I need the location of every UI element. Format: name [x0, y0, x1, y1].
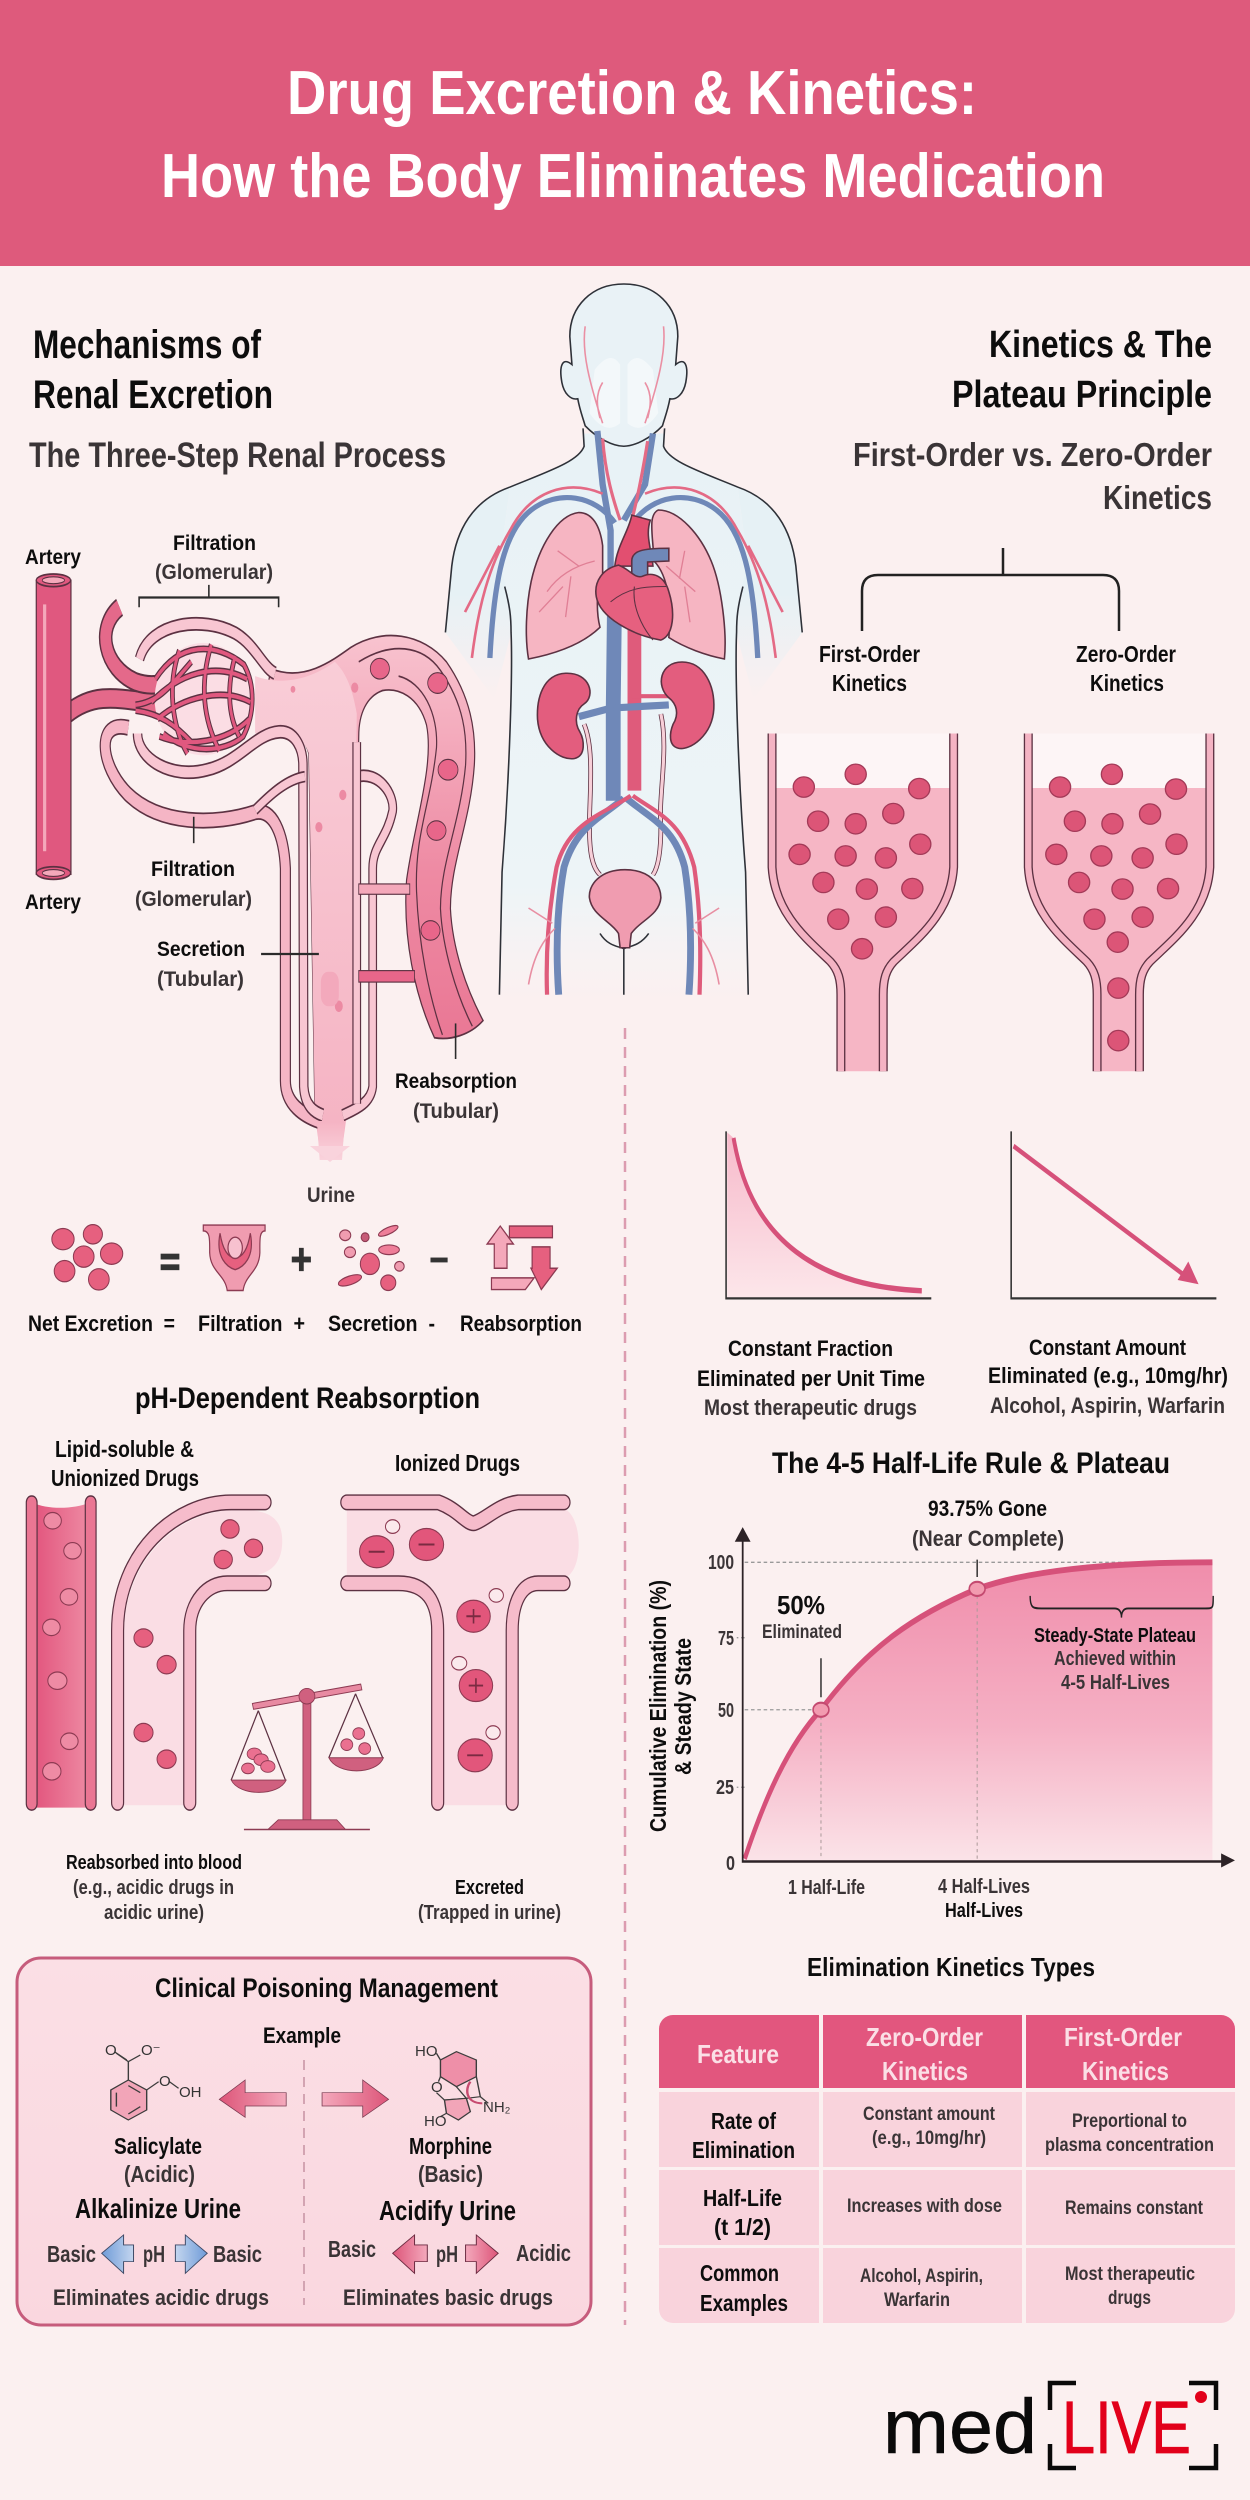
ph labels right: pH	[436, 2241, 458, 2267]
logo: medLIVE	[883, 2383, 1216, 2470]
chart: half-life plateau	[645, 1496, 1235, 1922]
label: artery top: Artery	[25, 546, 81, 569]
callout: steady-state plateau	[1034, 1625, 1196, 1694]
label: filtration top	[155, 532, 273, 584]
tree connector	[862, 548, 1119, 631]
row: common examples: Most therapeutic	[1065, 2264, 1195, 2285]
panel: left heading: The Three-Step Renal Process	[29, 436, 446, 475]
y axis ticks: 75	[718, 1628, 734, 1650]
row: rate of elimination: plasma concentration	[1045, 2135, 1214, 2156]
title	[161, 59, 1105, 211]
label: filtration lower	[135, 858, 252, 911]
tubule: ionized trapped	[347, 1502, 579, 1805]
illustration: nephron with labels	[25, 532, 517, 1207]
icon: reabsorption arrows	[487, 1226, 557, 1290]
reabsorption tubule	[259, 636, 483, 1110]
row: half-life	[703, 2185, 1204, 2240]
label: example: Example	[263, 2023, 341, 2048]
molecule labels: OH	[179, 2084, 202, 2101]
panel: right heading: Plateau Principle	[952, 374, 1212, 416]
molecule: morphine	[436, 2052, 488, 2120]
y axis title: Cumulative Elimination (%)	[645, 1580, 671, 1832]
chart: zero-order decline	[1011, 1131, 1216, 1298]
drug name: salicylate: Salicylate	[114, 2133, 202, 2159]
row: half-life: Remains constant	[1065, 2198, 1204, 2219]
caption: zero-order: Eliminated (e.g., 10mg/hr)	[988, 1363, 1228, 1388]
equation text: Secretion -	[328, 1311, 435, 1336]
molecule labels	[105, 2042, 511, 2130]
y axis ticks: 100	[708, 1552, 734, 1574]
icon: filtration cup	[203, 1225, 265, 1291]
label: filtration top: (Glomerular)	[155, 561, 273, 584]
label: lipid-soluble drugs: Lipid-soluble &	[55, 1436, 194, 1462]
glomerulus	[136, 643, 252, 755]
x axis labels: Half-Lives	[945, 1900, 1023, 1922]
note: eliminates basic drugs: Eliminates basic drugs	[343, 2285, 553, 2310]
callout: 93.75% gone: (Near Complete)	[912, 1526, 1064, 1551]
row: half-life: Increases with dose	[847, 2196, 1002, 2217]
row: common examples: drugs	[1108, 2288, 1151, 2309]
logo: medLIVE: med	[883, 2384, 1037, 2470]
label: filtration lower: Filtration	[151, 858, 235, 881]
heading: half-life rule: The 4-5 Half-Life Rule & Plateau	[772, 1447, 1170, 1480]
callout: 50% eliminated	[762, 1590, 842, 1643]
x axis labels: 4 Half-Lives	[938, 1876, 1030, 1898]
ph labels left	[47, 2241, 262, 2267]
molecule labels: HO	[415, 2043, 438, 2060]
label: first-order kinetics: Kinetics	[832, 670, 907, 696]
x axis labels	[788, 1876, 1030, 1922]
arrow: right to morphine	[322, 2080, 389, 2117]
equation text: Net Excretion =	[28, 1311, 175, 1336]
label: lipid-soluble drugs: Unionized Drugs	[51, 1465, 199, 1491]
callout: 50% eliminated: Eliminated	[762, 1622, 842, 1643]
row: common examples: Examples	[700, 2290, 788, 2316]
row: rate of elimination: Preportional to	[1072, 2111, 1187, 2132]
funnel: zero-order	[1028, 733, 1210, 1071]
y axis ticks: 25	[716, 1777, 734, 1799]
symbol: plus	[292, 1248, 311, 1271]
callout: 93.75% gone: 93.75% Gone	[928, 1496, 1047, 1521]
heading: pH-Dependent Reabsorption	[135, 1382, 480, 1415]
header banner	[0, 0, 1250, 266]
label: reabsorption: (Tubular)	[413, 1100, 499, 1123]
label: zero-order kinetics: Kinetics	[1090, 670, 1164, 696]
ph labels left: pH	[143, 2241, 165, 2267]
caption: reabsorbed into blood: acidic urine)	[104, 1902, 204, 1924]
table header row: Feature	[697, 2039, 779, 2069]
lungs	[526, 510, 725, 659]
drug name: salicylate	[114, 2133, 202, 2187]
ph labels right: Basic	[328, 2236, 376, 2262]
table header row: Kinetics	[882, 2056, 968, 2086]
callout: steady-state plateau: Steady-State Plateau	[1034, 1625, 1196, 1647]
label: reabsorption	[395, 1070, 517, 1123]
molecule labels: O⁻	[141, 2042, 161, 2059]
y axis title	[645, 1580, 696, 1832]
y axis ticks	[708, 1552, 735, 1875]
caption: reabsorbed into blood	[66, 1852, 242, 1924]
chart: first-order decay	[726, 1131, 931, 1298]
panel: left heading: Renal Excretion	[33, 373, 273, 417]
panel: right heading: First-Order vs. Zero-Order	[853, 436, 1212, 473]
arrow: left to salicylate	[219, 2080, 286, 2117]
central collecting tube	[255, 662, 357, 1144]
side tubules	[105, 607, 393, 1121]
urine outflow	[317, 1121, 345, 1160]
row: common examples: Common	[700, 2260, 779, 2286]
label: zero-order kinetics	[1076, 641, 1176, 696]
row: common examples: Alcohol, Aspirin,	[860, 2266, 983, 2287]
panel: right heading	[853, 324, 1212, 516]
balance scale	[231, 1684, 383, 1829]
callout: steady-state plateau: 4-5 Half-Lives	[1061, 1672, 1170, 1694]
logo: medLIVE: LIVE	[1062, 2386, 1191, 2469]
caption: excreted	[418, 1877, 561, 1924]
title: Drug Excretion & Kinetics:	[287, 59, 977, 128]
panel: right heading: Kinetics	[1103, 479, 1212, 516]
symbol: minus	[430, 1258, 448, 1262]
funnel: first-order	[772, 733, 954, 1071]
label: artery bottom: Artery	[25, 891, 81, 914]
callout: steady-state plateau: Achieved within	[1054, 1648, 1176, 1670]
note: eliminates acidic drugs: Eliminates acidic drugs	[53, 2285, 269, 2310]
row: rate of elimination	[692, 2104, 1214, 2163]
arrows: alkalinize urine	[102, 2235, 207, 2273]
ph labels right	[328, 2236, 571, 2267]
caption: first-order: Constant Fraction	[728, 1336, 893, 1361]
label: secretion: Secretion	[157, 938, 245, 961]
molecule labels: NH₂	[483, 2099, 511, 2116]
table: elimination kinetics	[659, 2015, 1235, 2323]
molecule labels: O	[105, 2042, 117, 2059]
row: rate of elimination: (e.g., 10mg/hr)	[872, 2128, 986, 2149]
drug name: morphine: Morphine	[409, 2133, 492, 2159]
label: secretion: (Tubular)	[157, 968, 244, 991]
table header row: Zero-Order	[866, 2022, 983, 2052]
artery vessel	[36, 574, 167, 879]
row: half-life: (t 1/2)	[714, 2214, 771, 2240]
row: common examples: Warfarin	[884, 2290, 950, 2311]
bladder	[589, 870, 661, 948]
caption: zero-order	[988, 1335, 1228, 1418]
caption: zero-order: Constant Amount	[1029, 1335, 1187, 1360]
label: filtration top: Filtration	[173, 532, 256, 555]
ph labels left: Basic	[213, 2241, 262, 2267]
label: lipid-soluble drugs	[51, 1436, 199, 1491]
table header row	[697, 2022, 1182, 2086]
label: zero-order kinetics: Zero-Order	[1076, 641, 1176, 667]
ph labels left: Basic	[47, 2241, 96, 2267]
heading: Clinical Poisoning Management	[155, 1973, 498, 2003]
panel: clinical poisoning management	[17, 1958, 591, 2325]
equation text	[28, 1311, 582, 1336]
caption: first-order: Eliminated per Unit Time	[697, 1366, 925, 1391]
blood vessel	[26, 1496, 96, 1810]
x axis labels: 1 Half-Life	[788, 1877, 865, 1899]
illustration: human body with organs	[445, 284, 802, 1000]
caption: first-order	[697, 1336, 925, 1420]
panel: right heading: Kinetics & The	[989, 324, 1212, 366]
drug name: morphine	[409, 2133, 492, 2187]
table header row: Kinetics	[1082, 2056, 1169, 2086]
connectors and cells	[359, 658, 458, 982]
heading: acidify urine: Acidify Urine	[379, 2195, 516, 2226]
molecule: salicylate	[111, 2052, 179, 2120]
row: common examples	[700, 2260, 1195, 2316]
drug name: salicylate: (Acidic)	[124, 2161, 195, 2187]
label: first-order kinetics: First-Order	[819, 641, 920, 667]
drug name: morphine: (Basic)	[418, 2161, 483, 2187]
kidneys	[537, 662, 714, 759]
label: filtration lower: (Glomerular)	[135, 888, 252, 911]
y axis ticks: 50	[718, 1700, 734, 1722]
caption: first-order: Most therapeutic drugs	[704, 1395, 917, 1420]
symbol: equals	[161, 1254, 179, 1270]
panel: left heading: Mechanisms of	[33, 323, 262, 367]
callout: 50% eliminated: 50%	[777, 1590, 825, 1620]
label: ionized drugs: Ionized Drugs	[395, 1450, 520, 1476]
heart	[596, 515, 673, 640]
row: rate of elimination: Elimination	[692, 2137, 795, 2163]
molecule labels: O	[431, 2079, 443, 2096]
equation: net excretion	[28, 1223, 582, 1336]
ph labels right: Acidic	[516, 2240, 571, 2266]
table header row: First-Order	[1064, 2022, 1182, 2052]
label: urine: Urine	[307, 1184, 355, 1207]
caption: excreted: Excreted	[455, 1877, 524, 1899]
arrows: acidify urine	[393, 2235, 498, 2273]
icon: drug particles	[52, 1225, 123, 1290]
label: first-order kinetics	[819, 641, 920, 696]
heading: elimination kinetics types: Elimination Kinetics Types	[807, 1952, 1095, 1982]
heading: alkalinize urine: Alkalinize Urine	[75, 2193, 241, 2224]
labels brackets	[139, 585, 456, 1059]
label: secretion	[157, 938, 245, 991]
molecule labels: HO	[424, 2113, 446, 2130]
y axis title: & Steady State	[670, 1638, 696, 1775]
callout: 93.75% gone	[912, 1496, 1064, 1551]
icon: secretion particles	[337, 1223, 404, 1291]
panel: left heading	[29, 323, 446, 475]
row: rate of elimination: Rate of	[711, 2108, 776, 2134]
molecule labels: O	[159, 2073, 171, 2090]
title: How the Body Eliminates Medication	[161, 142, 1105, 211]
caption: reabsorbed into blood: (e.g., acidic drugs in	[73, 1877, 234, 1899]
equation text: Filtration +	[198, 1311, 305, 1336]
central dashed divider	[624, 1028, 626, 2325]
equation text: Reabsorption	[460, 1311, 582, 1336]
caption: excreted: (Trapped in urine)	[418, 1902, 561, 1924]
row: half-life: Half-Life	[703, 2185, 782, 2211]
tubule: unionized reabsorbed	[118, 1502, 282, 1805]
y axis ticks: 0	[726, 1853, 735, 1875]
panel: pH-dependent reabsorption	[26, 1382, 579, 1924]
label: reabsorption: Reabsorption	[395, 1070, 517, 1093]
row: rate of elimination: Constant amount	[863, 2104, 996, 2125]
caption: reabsorbed into blood: Reabsorbed into blood	[66, 1852, 242, 1874]
